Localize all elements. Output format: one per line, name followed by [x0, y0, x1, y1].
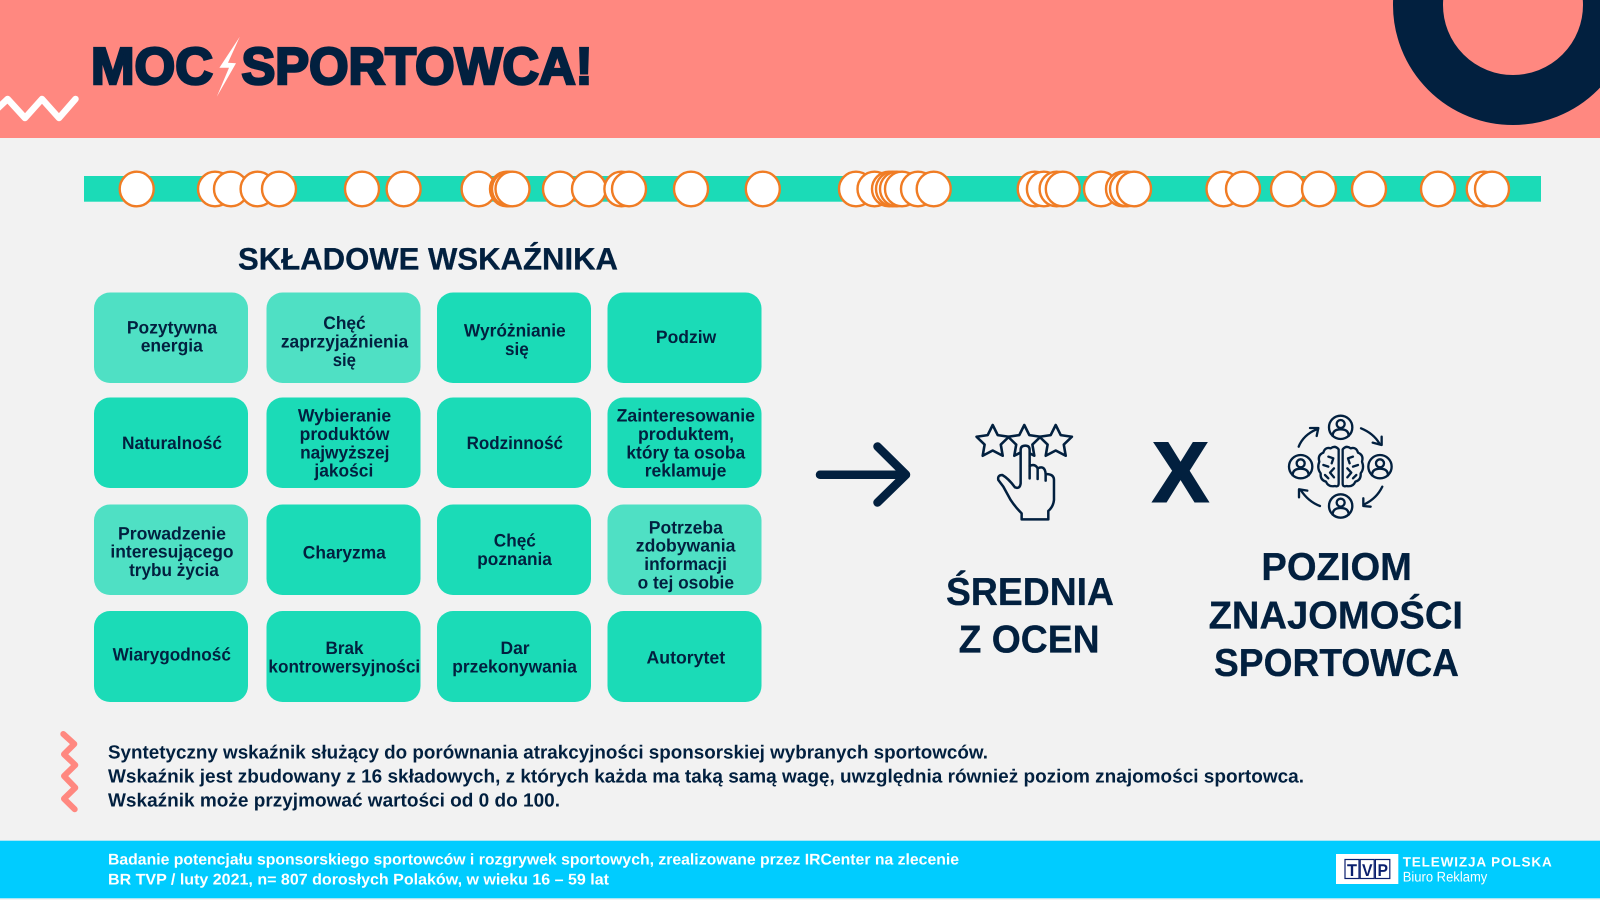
- tile: Wybieranie produktów najwyższej jakości: najwyższej: [300, 442, 389, 462]
- tile: Zainteresowanie produktem: produktem,: [638, 424, 734, 444]
- tile: Autorytet: Autorytet: [646, 647, 725, 667]
- tile: Prowadzenie interesującego trybu życia: [94, 504, 248, 595]
- tile: Charyzma: Charyzma: [303, 542, 387, 562]
- tile: Dar przekonywania: Dar: [500, 638, 530, 658]
- tile: Podziw: [608, 292, 762, 383]
- label: athlete familiarity level: POZIOM: [1261, 546, 1412, 589]
- tile: Dar przekonywania: [437, 611, 591, 702]
- header zigzag: [0, 99, 76, 118]
- tile: Potrzeba zdobywania informacji: informacji: [644, 554, 727, 574]
- tile: Brak kontrowersyjności: [266, 611, 420, 702]
- label: average rating: Z OCEN: [959, 619, 1100, 662]
- tile: Wiarygodność: [94, 611, 248, 702]
- tile: Prowadzenie interesującego trybu życia: Prowadzenie: [118, 523, 226, 543]
- icon: vertical zigzag: [63, 734, 75, 809]
- logo: TVP Telewizja Polska: Biuro Reklamy: [1403, 869, 1487, 885]
- tile: Zainteresowanie produktem: Zainteresowanie: [617, 406, 755, 426]
- tile: Wyróżnianie się: Wyróżnianie: [464, 321, 566, 341]
- tile: Pozytywna energia: Pozytywna: [127, 317, 218, 337]
- header band: [0, 0, 1600, 138]
- title: SPORTOWCA!: [242, 38, 592, 96]
- tile: Chęć zaprzyjaźnienia się: Chęć: [323, 313, 366, 333]
- logo: TVP Telewizja Polska: V: [1362, 861, 1373, 880]
- icon: brain and people cycle: [1289, 416, 1392, 518]
- title: MOC: [91, 38, 213, 96]
- footer source text: BR TVP / luty 2021, n= 807 dorosłych Polaków, w wieku 16 – 59 lat: [108, 871, 609, 888]
- tile: Charyzma: [266, 504, 420, 595]
- text block: indicator description: [108, 743, 1304, 812]
- tile: Autorytet: [608, 611, 762, 702]
- arrow: [820, 446, 906, 502]
- timeline bar with circles: [84, 172, 1541, 206]
- tile: Wybieranie produktów najwyższej jakości: [266, 398, 420, 488]
- tile: Wyróżnianie się: się: [505, 339, 529, 359]
- logo: TVP Telewizja Polska: TELEWIZJA POLSKA: [1403, 855, 1552, 870]
- icon: stars and hand: [976, 425, 1072, 519]
- tile: Prowadzenie interesującego trybu życia: interesującego: [110, 542, 234, 562]
- tile: Wybieranie produktów najwyższej jakości: produktów: [300, 424, 390, 444]
- tile: Naturalność: Naturalność: [122, 433, 222, 453]
- footer source text: Badanie potencjału sponsorskiego sportowców i rozgrywek sportowych, zrealizowane przez IRCenter na zlecenie: [108, 851, 959, 868]
- tile: Wybieranie produktów najwyższej jakości: Wybieranie: [298, 406, 391, 426]
- logo: TVP Telewizja Polska: [1336, 854, 1552, 885]
- tile: Wybieranie produktów najwyższej jakości: jakości: [313, 461, 373, 481]
- decorative ring: [1418, 0, 1600, 100]
- tile: Pozytywna energia: [94, 292, 248, 383]
- tile: Prowadzenie interesującego trybu życia: trybu życia: [129, 560, 220, 580]
- tile: Wyróżnianie się: [437, 292, 591, 383]
- tile: Podziw: Podziw: [656, 327, 717, 347]
- tile: Chęć poznania: [437, 504, 591, 595]
- label: athlete familiarity level: SPORTOWCA: [1214, 642, 1459, 685]
- title: [91, 37, 592, 97]
- tile: Brak kontrowersyjności: Brak: [326, 638, 364, 658]
- tile: Rodzinność: [437, 398, 591, 488]
- tile: Potrzeba zdobywania informacji: [608, 504, 762, 595]
- icon: lightning bolt: [217, 37, 240, 97]
- text block: indicator description: Wskaźnik może przyjmować wartości od 0 do 100.: [108, 791, 560, 812]
- tile: Dar przekonywania: przekonywania: [452, 656, 578, 676]
- label: athlete familiarity level: [1209, 546, 1463, 685]
- tile: Potrzeba zdobywania informacji: Potrzeba: [649, 517, 724, 537]
- tile: Chęć zaprzyjaźnienia się: się: [333, 350, 356, 370]
- multiplication sign: X: [1152, 426, 1208, 520]
- tile: Zainteresowanie produktem: [608, 398, 762, 488]
- text block: indicator description: Syntetyczny wskaźnik służący do porównania atrakcyjności sponsorskiej wybranych sportowców.: [108, 743, 988, 764]
- footer band: [0, 841, 1600, 898]
- tile: Rodzinność: Rodzinność: [467, 433, 563, 453]
- tile: Zainteresowanie produktem: reklamuje: [645, 461, 726, 481]
- label: athlete familiarity level: ZNAJOMOŚCI: [1209, 593, 1463, 637]
- tile: Chęć zaprzyjaźnienia się: [266, 292, 420, 383]
- tile: Naturalność: [94, 398, 248, 488]
- label: average rating: [946, 570, 1114, 662]
- tile: Chęć poznania: poznania: [477, 549, 553, 569]
- panel: component grid: [94, 292, 762, 702]
- logo: TVP Telewizja Polska: T: [1347, 861, 1358, 880]
- tile: Wiarygodność: Wiarygodność: [113, 645, 231, 665]
- footer source text: [108, 851, 959, 888]
- text block: indicator description: Wskaźnik jest zbudowany z 16 składowych, z których każda ma taką samą wagę, uwzględnia również poziom znajomości sportowca.: [108, 767, 1304, 788]
- tile: Chęć poznania: Chęć: [494, 531, 536, 551]
- tile: Potrzeba zdobywania informacji: o tej osobie: [638, 572, 734, 592]
- tile: Zainteresowanie produktem: który ta osoba: [626, 442, 746, 462]
- tile: Potrzeba zdobywania informacji: zdobywania: [636, 536, 736, 556]
- tile: Pozytywna energia: energia: [141, 336, 204, 356]
- label: average rating: ŚREDNIA: [946, 570, 1114, 614]
- logo: TVP Telewizja Polska: P: [1378, 861, 1388, 880]
- heading: components: SKŁADOWE WSKAŹNIKA: [238, 242, 618, 276]
- tile: Chęć zaprzyjaźnienia się: zaprzyjaźnienia: [281, 332, 409, 352]
- tile: Brak kontrowersyjności: kontrowersyjności: [268, 656, 420, 676]
